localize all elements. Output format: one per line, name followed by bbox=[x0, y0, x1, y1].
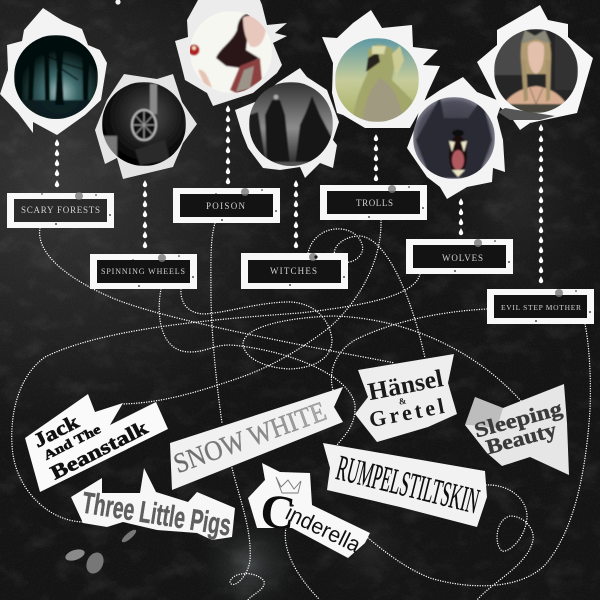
banner: Sleeping Beauty: Beauty bbox=[483, 417, 560, 459]
connector: Rumpelstiltskin curl bbox=[477, 485, 533, 600]
label: evil step mother: EVIL STEP MOTHER bbox=[501, 303, 581, 312]
picture badge: evil queen bbox=[477, 5, 593, 130]
connector: witches to Hansel and Gretel bbox=[308, 229, 425, 358]
connector: Snow White to bottom loop bbox=[230, 468, 264, 600]
banner: Hansel and Gretel: Hänsel bbox=[366, 365, 445, 406]
banner: Three Little Pigs bbox=[71, 468, 235, 543]
banner: Hansel and Gretel: & bbox=[398, 395, 408, 407]
connector: spinning wheels to Rumpelstiltskin bbox=[159, 289, 355, 445]
banner: Jack and the Beanstalk: And The bbox=[41, 421, 103, 463]
label: evil step mother bbox=[487, 289, 594, 324]
banner: Jack and the Beanstalk: Beanstalk bbox=[47, 416, 152, 485]
banner: Snow White: SNOW WHITE bbox=[170, 396, 331, 480]
connector: trolls to Jack and the Beanstalk bbox=[123, 220, 381, 404]
banner: Hansel and Gretel: Gretel bbox=[367, 393, 446, 432]
picture badge: spinning wheel bbox=[95, 74, 197, 179]
picture badge: scary forest bbox=[0, 8, 107, 135]
label: poison: POISON bbox=[206, 201, 246, 211]
label: wolves: WOLVES bbox=[442, 253, 483, 263]
connector: scary forests to Hansel and Gretel bbox=[40, 228, 395, 363]
picture badge: witches bbox=[235, 68, 339, 178]
picture badge: troll bbox=[322, 10, 440, 128]
picture badge: poison apple woman bbox=[175, 0, 287, 106]
banner: Jack and the Beanstalk: Jack bbox=[30, 410, 84, 452]
banner: Cinderella bbox=[248, 463, 370, 558]
banner: Cinderella: inderella bbox=[282, 500, 365, 558]
label: scary forests bbox=[7, 192, 114, 228]
label: wolves bbox=[406, 239, 513, 274]
icon: crown bbox=[276, 477, 301, 493]
teardrop dotted lines from pictures to labels bbox=[55, 105, 543, 283]
label: spinning wheels bbox=[90, 254, 197, 289]
banner: Cinderella: C bbox=[258, 484, 298, 541]
label: witches: WITCHES bbox=[270, 266, 317, 276]
connector: spinning wheels to Sleeping Beauty bbox=[181, 289, 521, 401]
banner: Jack and the Beanstalk bbox=[25, 394, 168, 492]
connector: evil step mother to Cinderella bbox=[368, 324, 590, 586]
connector: wolves to Three Little Pigs bbox=[12, 274, 420, 522]
label: trolls bbox=[320, 185, 427, 220]
banner: Hansel and Gretel bbox=[355, 354, 457, 442]
label: witches bbox=[241, 253, 348, 289]
connector: Cinderella to bottom edge bbox=[285, 528, 320, 600]
banner: Sleeping Beauty bbox=[465, 384, 569, 475]
connector: poison to Snow White bbox=[211, 223, 222, 423]
banner: Sleeping Beauty: Sleeping bbox=[472, 396, 565, 442]
dotted connector lines from elements to tales bbox=[12, 220, 590, 600]
label: spinning wheels: SPINNING WHEELS bbox=[101, 267, 185, 276]
label: poison bbox=[173, 188, 280, 223]
banner: Rumpelstiltskin bbox=[323, 443, 487, 527]
picture badge: wolf bbox=[407, 77, 505, 199]
connector: evil step mother to Snow White bbox=[331, 309, 487, 390]
label: scary forests: SCARY FORESTS bbox=[21, 205, 100, 215]
banner: Three Little Pigs: Three Little Pigs bbox=[80, 487, 233, 543]
label: trolls: TROLLS bbox=[356, 198, 393, 208]
